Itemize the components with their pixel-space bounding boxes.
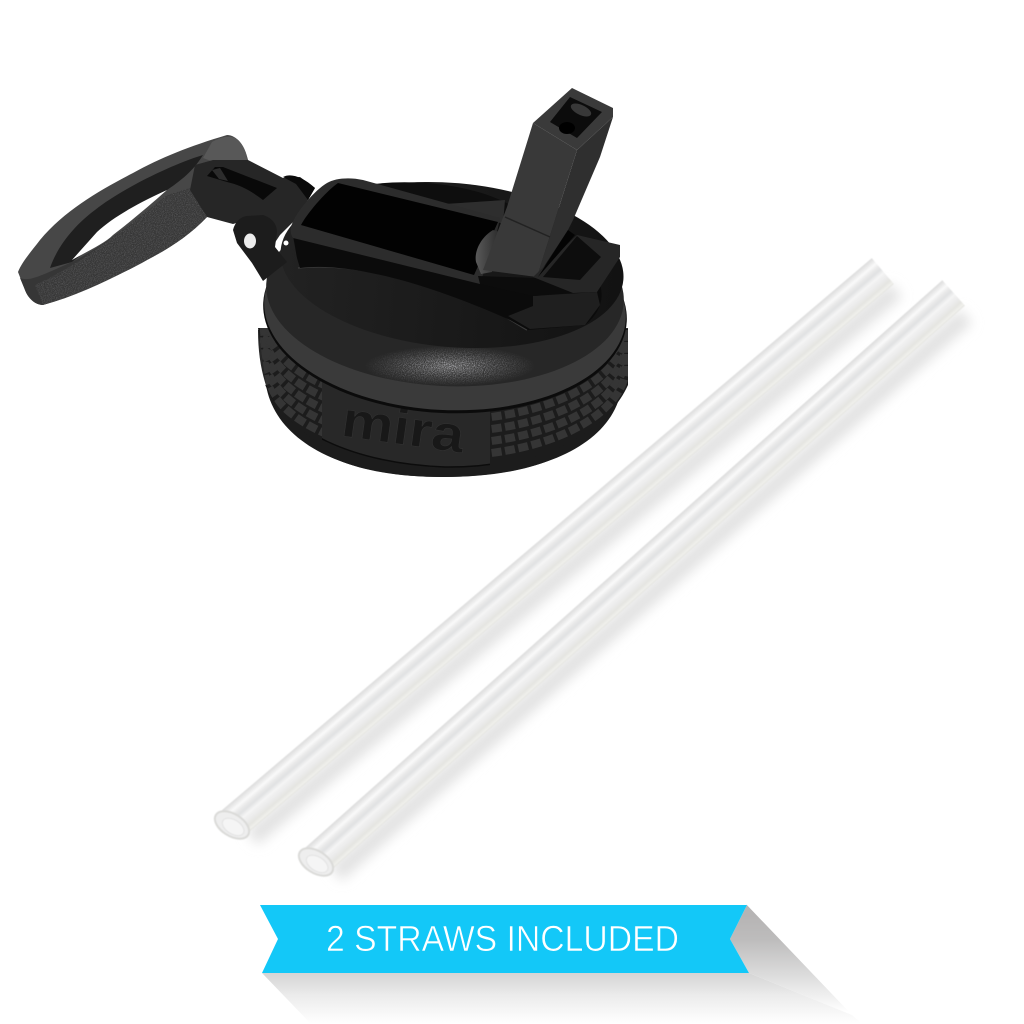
spout gap <box>538 230 575 277</box>
link opening <box>207 167 277 200</box>
tray base block <box>508 292 600 329</box>
arm speckle <box>35 188 207 305</box>
base groove <box>266 385 622 467</box>
spout side face <box>537 117 613 277</box>
carry loop handle <box>18 135 248 305</box>
grip body <box>258 330 628 477</box>
pivot ball <box>476 230 500 274</box>
banner shadow right fold <box>730 903 852 1015</box>
flap recess <box>543 236 601 280</box>
lid top surface <box>274 168 630 362</box>
mira logo: mira <box>338 391 469 464</box>
drinking tray <box>291 178 602 330</box>
spout crease <box>505 217 550 237</box>
handle inner surface <box>50 155 203 268</box>
ribbon shape <box>260 905 749 973</box>
lid outer band <box>259 201 631 419</box>
lid sweep curve <box>298 267 527 330</box>
banner shadow bottom <box>262 973 862 1024</box>
tray rim <box>291 178 500 284</box>
straw 2 open end <box>294 843 338 881</box>
straw 1 open end <box>210 806 254 844</box>
hinge link arm <box>190 160 315 250</box>
tray interior <box>301 183 498 275</box>
ribbon label: 2 STRAWS INCLUDED <box>326 918 679 959</box>
spout top collar <box>533 88 613 150</box>
link web <box>212 168 228 181</box>
straw pair <box>210 258 966 881</box>
banner: 2 straws included <box>260 905 749 973</box>
hinge gap <box>284 240 288 246</box>
lid back disc <box>363 182 510 240</box>
lid back patch <box>445 200 505 224</box>
handle opening <box>72 190 167 260</box>
straw 1 <box>210 258 894 844</box>
shoulder highlight <box>365 346 535 386</box>
tray front wall <box>292 230 602 330</box>
tray lower lip <box>478 276 575 296</box>
grip texture <box>258 328 628 465</box>
handle front arm <box>20 188 207 305</box>
spout hole <box>559 122 575 134</box>
hinge pin <box>244 234 256 248</box>
flap <box>533 230 620 293</box>
flip cap <box>18 88 640 480</box>
lid shoulder <box>261 191 629 395</box>
spout mouth lump <box>569 101 593 119</box>
hinge plate <box>233 215 287 281</box>
straw shadows <box>252 290 966 874</box>
straw 2 <box>294 280 965 881</box>
bottom lip <box>266 385 622 477</box>
straw spout <box>483 88 613 277</box>
lid shadow line <box>258 202 632 422</box>
hinge barrel end <box>283 175 315 200</box>
spout mouth <box>550 97 602 138</box>
spout front face <box>483 123 577 277</box>
handle top highlight <box>203 137 247 165</box>
